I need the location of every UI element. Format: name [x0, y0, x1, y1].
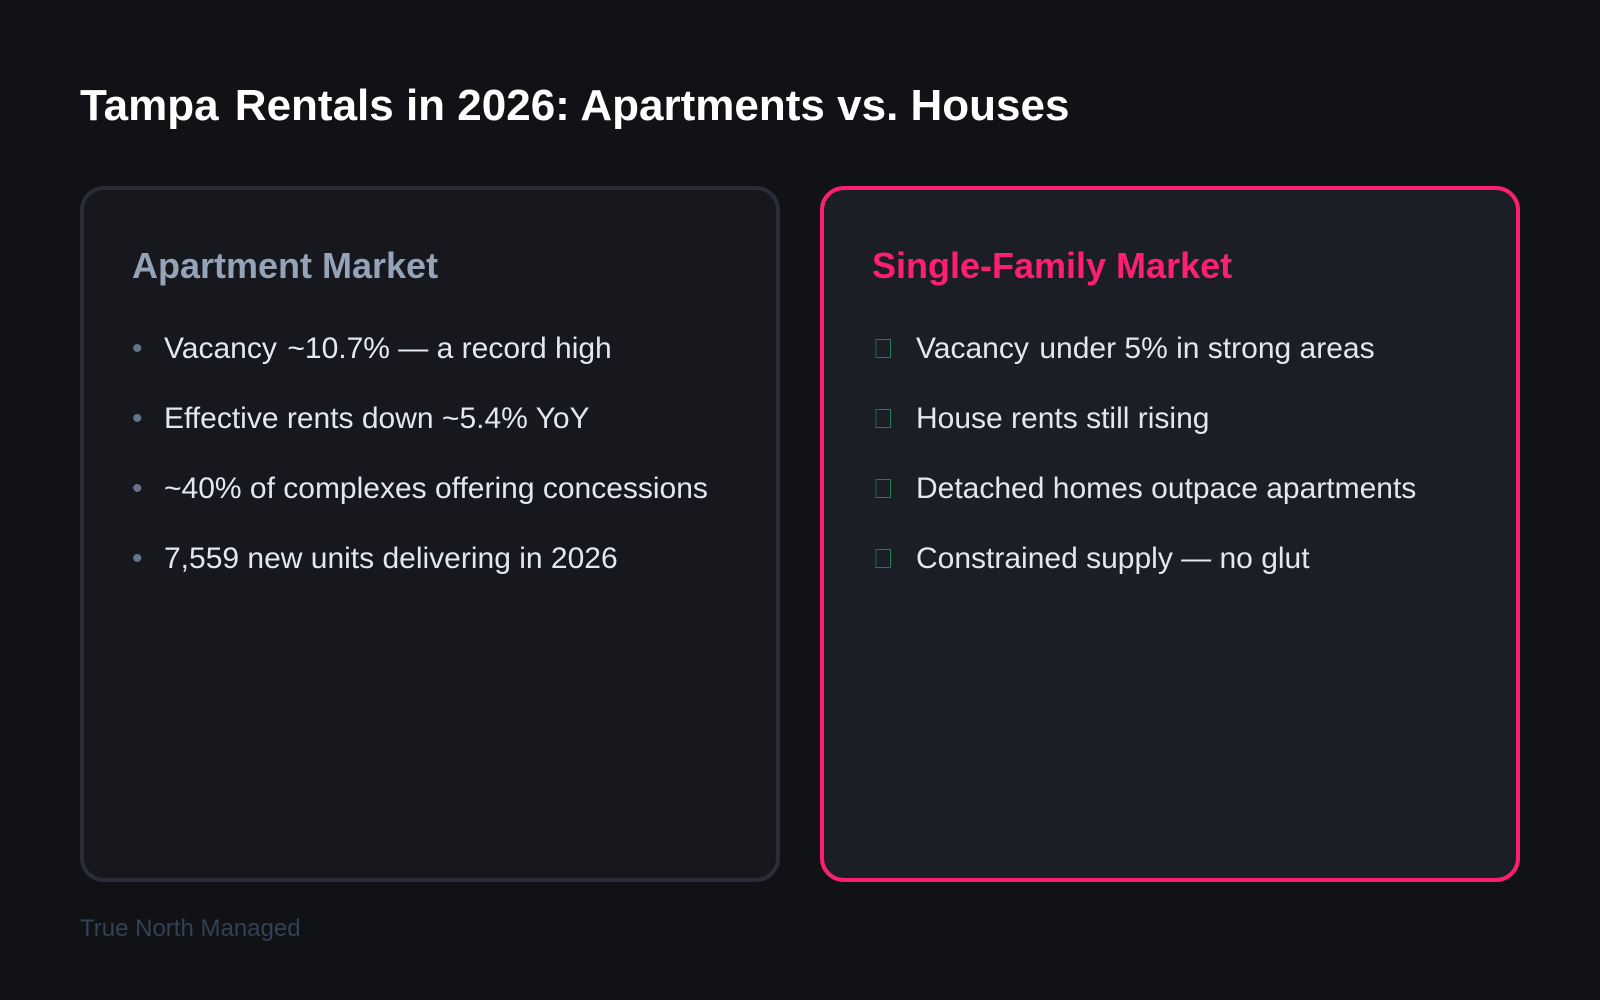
text: House rents still rising [916, 402, 1209, 435]
text: Vacancy under 5% in strong areas [916, 332, 1375, 365]
text: Detached homes outpace apartments [916, 472, 1416, 505]
list item: new units: • [132, 542, 143, 575]
list item: concessions: ~40% of complexes offering concessions [164, 472, 708, 505]
list item: constrained supply [875, 542, 1310, 575]
title: Tampa Rentals in 2026: Apartments vs. Houses [80, 81, 1069, 130]
list item: rents: Effective rents down ~5.4% YoY [164, 402, 590, 435]
list item: vacancy: • [132, 332, 143, 365]
list item: detached homes [875, 472, 1416, 505]
panel: apartment market [80, 186, 780, 882]
footer: True North Managed [80, 915, 301, 942]
text: Constrained supply — no glut [916, 542, 1310, 575]
heading: single-family market: Single-Family Market [872, 245, 1232, 286]
list item: new units: 7,559 new units delivering in 2026 [164, 542, 618, 575]
list item: house rents rising [875, 402, 1209, 435]
heading: apartment market: Apartment Market [132, 245, 438, 286]
list item: vacancy: Vacancy ~10.7% — a record high [164, 332, 612, 365]
list item: concessions: • [132, 472, 143, 505]
panel: single-family market [820, 186, 1520, 882]
list item: rents: • [132, 402, 143, 435]
list item: vacancy under 5% [875, 332, 1375, 365]
